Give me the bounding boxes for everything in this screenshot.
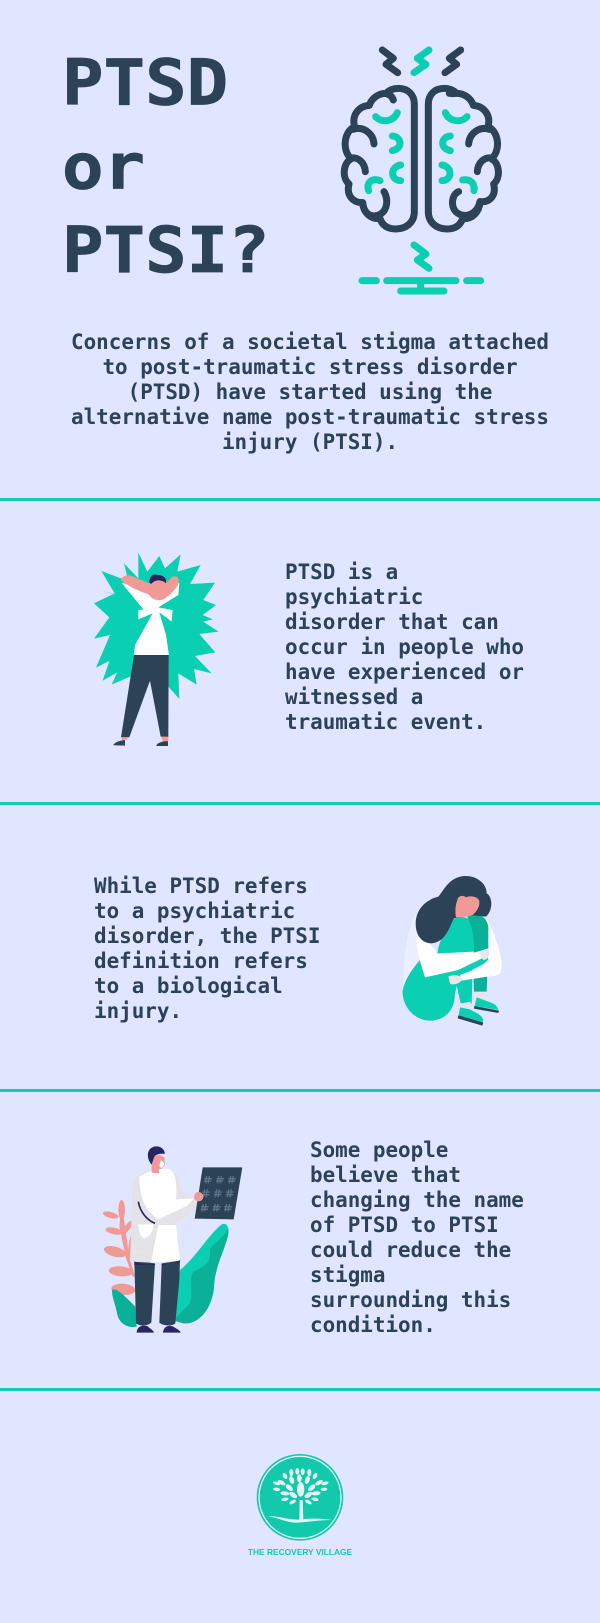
shirt <box>121 578 179 655</box>
coral plant <box>102 1200 136 1296</box>
illustration: doctor with x-ray and plants <box>102 1146 242 1333</box>
shoes <box>459 997 498 1023</box>
hands <box>448 948 489 984</box>
illustration: woman hugging knees <box>403 876 502 1026</box>
knee <box>437 917 474 953</box>
head <box>152 1155 165 1173</box>
hair <box>149 575 166 584</box>
right arm <box>460 918 502 981</box>
green leaves <box>173 1224 229 1323</box>
near leg <box>454 967 473 1003</box>
arms and face <box>121 575 179 600</box>
starburst <box>94 552 219 699</box>
shoes <box>113 740 168 746</box>
text: PTSD definition: PTSD is a psychiatric disorder that can occur in people who have experienced or witnessed a traumatic event. <box>285 560 524 734</box>
logo <box>257 1454 343 1541</box>
hair <box>148 1146 165 1165</box>
illustration: distressed man with starburst <box>94 552 219 746</box>
shoes <box>137 1326 181 1333</box>
icon: brain with lightning bolts <box>344 50 498 291</box>
forearm <box>458 957 488 975</box>
body <box>403 960 463 1021</box>
intro text: Concerns of a societal stigma attached to post-traumatic stress disorder (PTSD) have started using the alternative name post-traumatic stress injury (PTSI). <box>71 330 549 454</box>
dotted shadow <box>403 913 423 990</box>
title: PTSD or PTSI? <box>62 47 270 288</box>
face <box>455 896 479 917</box>
hand <box>194 1192 203 1201</box>
x-ray sheet <box>195 1167 242 1219</box>
far leg <box>473 973 487 992</box>
legs <box>134 1261 180 1326</box>
white top: torso and upper arm <box>416 935 482 977</box>
text: PTSI definition: While PTSD refers to a psychiatric disorder, the PTSI definition refers to a biological injury. <box>94 874 320 1023</box>
lab coat <box>130 1168 199 1263</box>
trousers <box>121 655 169 737</box>
hair <box>416 876 491 943</box>
text: stigma: Some people believe that changing the name of PTSD to PTSI could reduce the stigma surrounding this condition. <box>310 1138 524 1337</box>
socks <box>462 993 486 1011</box>
logo name: THE RECOVERY VILLAGE <box>248 1547 353 1557</box>
tree <box>267 1468 332 1523</box>
